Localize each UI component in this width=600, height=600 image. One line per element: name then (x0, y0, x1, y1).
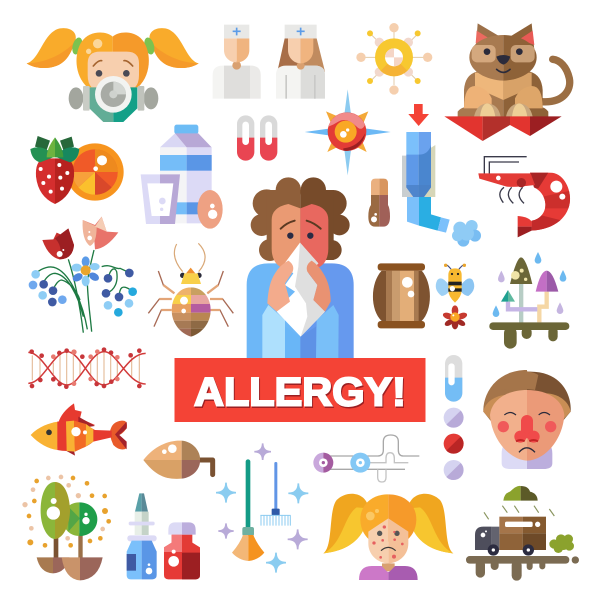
icon: bug allergen (148, 243, 233, 337)
red tulip (42, 228, 74, 259)
pollution cloud (503, 486, 538, 501)
icon: broom (232, 459, 264, 561)
banner: ALLERGY!: ALLERGY! (194, 370, 406, 414)
coat (262, 305, 285, 358)
icon: polluting truck (466, 486, 579, 581)
icon: allergen compass star (305, 89, 391, 175)
icon: circuit connector (313, 435, 419, 482)
icon: fish (31, 403, 127, 456)
spray cloud (452, 220, 481, 247)
banner: ALLERGY!: ALLERGY! (195, 372, 407, 416)
icon: nasal spray bottle (127, 493, 157, 579)
icon: small brown bottle (368, 179, 390, 227)
icon: three tablets (444, 408, 464, 480)
icon: pollen virus (356, 23, 432, 95)
pink tulip (83, 217, 118, 249)
icon: leaf (143, 441, 213, 479)
icon: inhaler with arrow (402, 104, 481, 247)
blue flower (71, 256, 100, 286)
icon: red flower (442, 305, 468, 329)
icon: DNA helix (28, 347, 146, 389)
icon: cat (444, 23, 570, 141)
icon: rake (260, 462, 291, 526)
icon: male nurse (213, 25, 261, 99)
banner: ALLERGY! (174, 358, 426, 422)
icon: girl with gas mask (27, 28, 199, 122)
icon: pollen trees (22, 475, 111, 580)
icon: two capsules (237, 115, 277, 161)
sparkles (216, 443, 308, 573)
face (272, 204, 328, 270)
tissue (277, 243, 325, 337)
red arrow (408, 104, 429, 126)
shirt (247, 263, 354, 358)
icon: mold mushrooms (489, 252, 569, 349)
icon: shrimp (478, 157, 573, 237)
red cushion (444, 116, 562, 141)
icon: orange slice (66, 143, 124, 201)
icon: boy with red nose (483, 370, 571, 469)
icon: female nurse (276, 25, 325, 99)
sick person blowing nose (247, 177, 354, 358)
icon: strawberry (30, 136, 79, 204)
icon: girl with rash (323, 494, 453, 580)
hands (267, 261, 331, 312)
icon: wooden barrel (370, 263, 433, 328)
exhaust cloud (549, 534, 574, 553)
icon: flower bouquet (29, 217, 137, 333)
gas mask (69, 76, 158, 122)
icon: milk carton, glass and egg (141, 125, 223, 229)
icon: blue capsule (445, 355, 462, 402)
icon: red medicine bottle (164, 522, 200, 579)
icon: bee (436, 264, 474, 303)
curly hair (251, 177, 350, 261)
